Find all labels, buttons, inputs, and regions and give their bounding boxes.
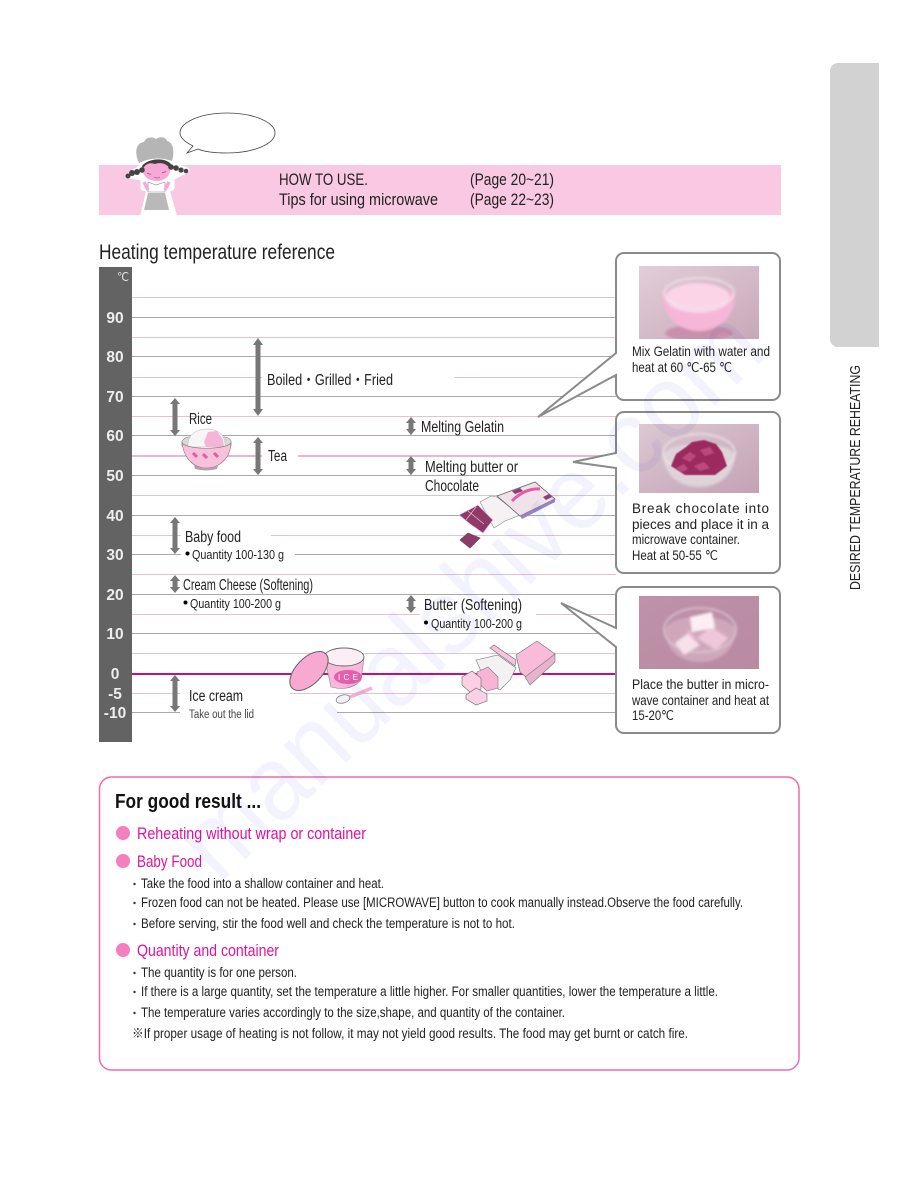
labels: Chocolate: [425, 478, 479, 495]
scale bar: 50: [106, 468, 124, 485]
label masks: [180, 370, 536, 721]
watermark: manualshive.com: [154, 286, 785, 902]
icon: chocolate bar: [459, 482, 555, 548]
section: baby food: Take the food into a shallow container and heat.: [141, 876, 384, 891]
photo: chocolate bowl: [639, 424, 759, 493]
labels: Melting butter or: [425, 459, 518, 476]
icon: butter box: [462, 641, 555, 705]
labels: Tea: [268, 448, 287, 465]
panel: chocolate callout: Heat at 50-55 ℃: [632, 547, 718, 563]
section: quantity and container: If there is a large quantity, set the temperature a little higher. For smaller quantities, lower the temperature a little.: [141, 984, 718, 999]
labels: Quantity 100-130 g: [192, 548, 284, 562]
icon: rice bowl: [182, 429, 231, 470]
labels: Baby food: [185, 529, 241, 546]
labels: Ice cream: [189, 688, 243, 705]
photo: butter bowl: [639, 596, 759, 669]
pink how-to band: [99, 165, 781, 215]
labels: Rice: [189, 411, 212, 428]
scale bar: -10: [104, 705, 126, 722]
icon: chef girl reading: [126, 137, 188, 214]
icon: ice cream tub: ICE: [338, 673, 358, 682]
section: quantity and container: ※If proper usage of heating is not follow, it may not yield good results. The food may get burnt or catch fire.: [132, 1026, 688, 1041]
panel: butter callout: [561, 587, 780, 733]
panel: chocolate callout: Break chocolate into: [632, 501, 769, 516]
scale bar: 20: [106, 587, 124, 604]
scale bar: 80: [106, 349, 124, 366]
panel: gelatin callout: Mix Gelatin with water and: [632, 343, 770, 359]
pink how-to band: (Page 20~21): [470, 170, 554, 189]
labels: Take out the lid: [189, 709, 254, 721]
panel: gelatin callout: [538, 253, 780, 417]
panel heading: For good result ...: [115, 791, 261, 813]
photo: gelatin bowl: [639, 266, 759, 341]
panel: butter callout: wave container and heat at: [631, 692, 769, 708]
section: baby food: [116, 853, 743, 931]
scale bar: ℃: [117, 270, 129, 284]
panel: chocolate callout: [573, 412, 780, 573]
section: quantity and container: The quantity is for one person.: [141, 965, 297, 980]
grid lines: [132, 298, 616, 712]
labels: Melting Gelatin: [421, 419, 504, 436]
section: quantity and container: Quantity and container: [137, 942, 279, 960]
pink how-to band: Tips for using microwave: [279, 190, 438, 209]
scale bar: 70: [106, 389, 124, 406]
section: baby food: Frozen food can not be heated. Please use [MICROWAVE] button to cook manually instead.Observe the food carefully.: [141, 895, 743, 910]
section: reheating: Reheating without wrap or container: [137, 825, 366, 843]
pink how-to band: HOW TO USE.: [279, 170, 368, 189]
labels: Boiled・Grilled・Fried: [267, 372, 393, 389]
panel: chocolate callout: microwave container.: [632, 531, 740, 547]
panel: chocolate callout: pieces and place it in a: [632, 517, 769, 532]
panel: butter callout: 15-20℃: [632, 707, 674, 723]
temperature chart: [99, 267, 616, 742]
labels: Cream Cheese (Softening): [183, 577, 313, 594]
side label: DESIRED TEMPERATURE REHEATING: [847, 365, 864, 590]
section: baby food: Baby Food: [137, 853, 202, 871]
section: quantity and container: The temperature varies accordingly to the size,shape, and quantity of the container.: [141, 1005, 565, 1020]
pink how-to band: (Page 22~23): [470, 190, 554, 209]
panel: for good result: [100, 777, 799, 1070]
scale bar: -5: [108, 686, 122, 703]
scale bar: 90: [106, 310, 124, 327]
panel: butter callout: Place the butter in micro-: [632, 676, 769, 692]
labels: Quantity 100-200 g: [190, 597, 281, 611]
scale bar: [99, 267, 132, 742]
labels: Quantity 100-200 g: [431, 617, 522, 631]
speech bubble: [180, 113, 275, 153]
scale bar: 30: [106, 547, 124, 564]
white outline: [128, 164, 187, 214]
scale bar: 60: [106, 428, 124, 445]
side tab: [830, 63, 879, 347]
arrows: [170, 338, 416, 712]
heading: Heating temperature reference: [99, 241, 335, 264]
scale bar: 10: [106, 626, 124, 643]
labels: [183, 372, 522, 721]
scale bar: 40: [106, 508, 124, 525]
panel: gelatin callout: heat at 60 ℃-65 ℃: [632, 359, 732, 375]
scale bar: 0: [111, 666, 119, 683]
labels: Butter (Softening): [424, 597, 522, 614]
section: baby food: Before serving, stir the food well and check the temperature is not to hot.: [141, 916, 515, 931]
section: quantity and container: [116, 942, 718, 1041]
icon: ice cream tub: [283, 645, 372, 705]
